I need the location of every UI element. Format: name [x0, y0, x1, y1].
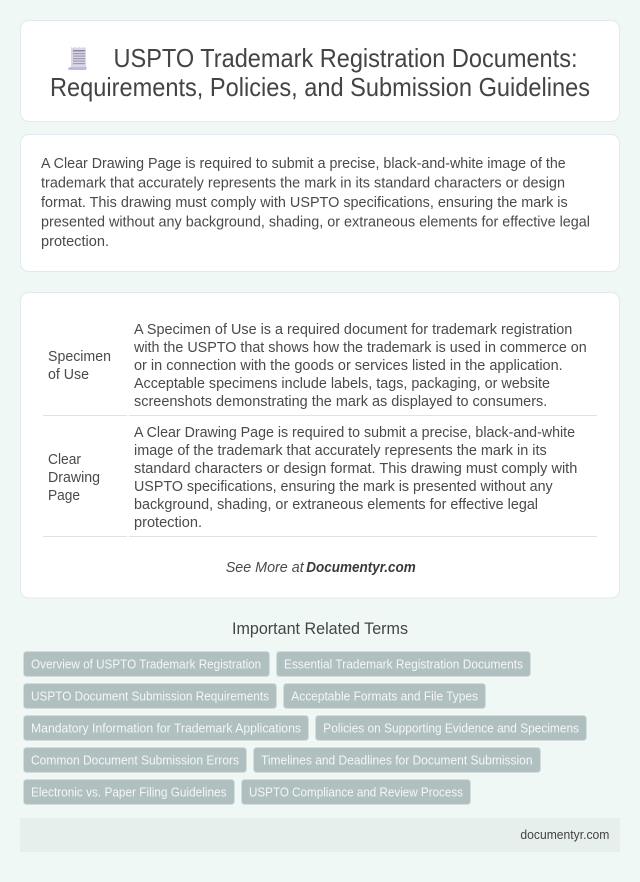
panel: definitions table [20, 292, 620, 598]
text block: summary paragraph: trademark that accurately represents the mark in its standard characters or design [41, 176, 565, 192]
tag: Common Document Submission Errors [31, 752, 239, 767]
tag [24, 780, 234, 804]
tag: Policies on Supporting Evidence and Specimens [323, 720, 579, 735]
table row: Clear Drawing Page: standard characters or design format. This drawing must comply with [134, 461, 577, 477]
tag [24, 652, 270, 676]
tag [276, 652, 530, 676]
title: Requirements, Policies, and Submission Guidelines [50, 72, 590, 102]
tag [242, 780, 470, 804]
tag: USPTO Document Submission Requirements [31, 688, 269, 703]
tag: Electronic vs. Paper Filing Guidelines [31, 784, 227, 799]
panel: header [20, 20, 620, 122]
tag [284, 684, 486, 708]
table row: Specimen of Use: A Specimen of Use is a required document for trademark registration [134, 322, 572, 338]
table row: Clear Drawing Page: background, shading, or extraneous elements for effective legal [134, 497, 538, 513]
text block: summary paragraph: A Clear Drawing Page is required to submit a precise, black-and-white image of the [41, 156, 566, 172]
table row: Clear Drawing Page: USPTO specifications, ensuring the mark is presented without any [134, 479, 553, 495]
table row: Specimen of Use: of Use [48, 367, 89, 383]
tag [254, 748, 540, 772]
link: see more: See More at [226, 560, 305, 576]
table row: Specimen of Use: with the USPTO that shows how the trademark is used in commerce on [133, 340, 587, 356]
tag: Overview of USPTO Trademark Registration [31, 656, 261, 671]
panel: summary [20, 134, 620, 272]
link: see more: Documentyr.com [306, 560, 416, 576]
table row: Clear Drawing Page: A Clear Drawing Page is required to submit a precise, black-and-white [134, 425, 575, 441]
tag [24, 748, 246, 772]
tag: Mandatory Information for Trademark Applications [31, 720, 301, 735]
text block: summary paragraph: presented without any background, shading, or extraneous elements for effective legal [41, 214, 590, 230]
text block: summary paragraph: protection. [41, 234, 109, 250]
table row: Clear Drawing Page: Drawing [48, 470, 100, 486]
table row: Clear Drawing Page: image of the trademark that accurately represents the mark in its [134, 443, 547, 459]
table row: Specimen of Use [43, 322, 597, 416]
tag: Timelines and Deadlines for Document Submission [261, 752, 532, 767]
text block: summary paragraph: format. This drawing must comply with USPTO specifications, ensuring the mark is [41, 195, 568, 211]
table row: Specimen of Use: or in connection with the goods or services listed in the application. [134, 358, 563, 374]
title: USPTO Trademark Registration Documents: [114, 43, 578, 73]
tags: related terms [24, 652, 586, 804]
table row: Specimen of Use: screenshots demonstrating the mark as displayed to consumers. [134, 394, 547, 410]
tag [316, 716, 586, 740]
table row: Specimen of Use: Specimen [48, 349, 111, 365]
tag: Acceptable Formats and File Types [291, 688, 478, 703]
tag: USPTO Compliance and Review Process [249, 784, 463, 799]
footer: documentyr.com [520, 827, 609, 842]
footer [20, 818, 620, 852]
title [50, 43, 590, 102]
tag [24, 716, 308, 740]
table row: Clear Drawing Page: protection. [134, 515, 202, 531]
text block: summary paragraph [41, 156, 590, 250]
table row: Clear Drawing Page [43, 425, 597, 537]
heading: important related terms: Important Related Terms [232, 619, 408, 638]
link: see more [226, 560, 416, 576]
table row: Clear Drawing Page: Clear [48, 452, 81, 468]
tag [24, 684, 276, 708]
table row: Clear Drawing Page: Page [48, 488, 80, 504]
tag: Essential Trademark Registration Documents [284, 656, 523, 671]
table row: Specimen of Use: Acceptable specimens include labels, tags, packaging, or website [134, 376, 550, 392]
icon: document receipt [68, 47, 87, 70]
